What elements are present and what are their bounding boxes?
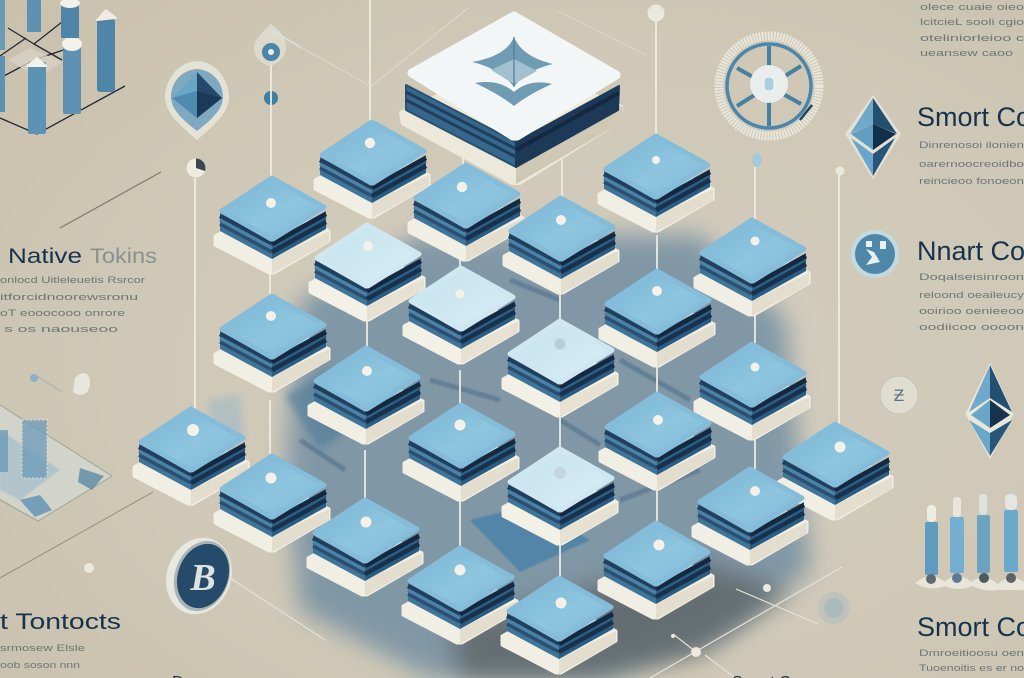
icon: pin marker [254, 24, 300, 66]
text block: upper right [920, 2, 1024, 59]
block [695, 344, 809, 440]
text block: native tokens: oT eooocooo onrore [0, 308, 125, 319]
text block: native tokens: itforcidnoorewsronu [0, 292, 138, 303]
heading: t Tontocts: t Tontocts [0, 609, 121, 634]
icon: isometric pillars [0, 0, 125, 134]
block [134, 409, 248, 505]
block [504, 198, 618, 294]
block [404, 405, 518, 501]
block [215, 178, 329, 274]
text block: right 3: Dmroeitioosu oen [919, 648, 1024, 659]
block [215, 296, 329, 392]
icon: half ball [186, 158, 206, 178]
icon: B coin [156, 528, 242, 624]
block [695, 220, 809, 316]
heading: Native Tokens: Tokins [90, 245, 157, 268]
text block: right 1: Dinrenosoi ilonien [919, 140, 1024, 151]
clipped bottom headings [172, 674, 817, 678]
block [502, 578, 616, 674]
text block: right 2: ooirioo oenieeoo [919, 306, 1024, 317]
icon: white ball [84, 563, 94, 573]
text block: right 2: oodiicoo oooon [919, 322, 1024, 333]
icon: isometric city sketch [0, 373, 112, 521]
text block: right 2: Doqalseisinroon [919, 272, 1024, 283]
text block: right 1: reincieoo fonoeon [919, 176, 1024, 187]
text block: right 3 [919, 648, 1024, 674]
text block: upper right: ueansew caoo [920, 48, 1013, 59]
icon: vials [915, 494, 1024, 590]
pin heads [187, 138, 846, 609]
vertical pin lines [195, 0, 839, 600]
text block: upper right: olece cuaie oieo [920, 2, 1024, 13]
text block: right 3: Tuoenoitis es er no [919, 663, 1024, 674]
light block [503, 449, 617, 545]
block [599, 136, 713, 232]
icon: B coin: B [189, 557, 216, 599]
light block [310, 225, 424, 321]
block [693, 469, 807, 565]
block [409, 165, 523, 261]
icon: round badge [851, 230, 899, 278]
icon: ethereum right upper [846, 96, 900, 178]
text block: lower left: srmosew Elsle [0, 643, 85, 654]
icon: ethereum right lower [966, 364, 1013, 458]
block [308, 500, 422, 596]
block [309, 348, 423, 444]
text block: right 2: reloond oeaileucy [919, 290, 1024, 301]
text block: native tokens: s os naouseoo [4, 324, 118, 335]
light block [404, 268, 518, 364]
text block: right 1 [919, 140, 1024, 187]
icon: small faded coin [818, 592, 850, 624]
heading: Native Tokens: Native [8, 245, 82, 268]
text block: lower left: oob soson nnn [0, 660, 80, 671]
heading: Native Tokens [8, 245, 157, 268]
reflective floor shadow [208, 235, 810, 678]
block [215, 456, 329, 552]
block [403, 548, 517, 644]
block [600, 271, 714, 367]
text block: right 2 [919, 272, 1024, 333]
icon: pale coin [880, 376, 918, 414]
block [599, 523, 713, 619]
block row 1 [315, 122, 429, 218]
light block [503, 321, 617, 417]
text block: upper right: oteliniorleioo c [920, 33, 1024, 44]
text block: right 1: oarernoocreoidbo [919, 159, 1024, 170]
text block: upper right: lcitcieL sooli cgio [920, 17, 1024, 28]
large top block [400, 16, 622, 184]
icon: ethereum badge [165, 61, 229, 140]
text block: native tokens: onlocd Uitleleuetis Rsrcor [0, 275, 145, 286]
heading: Nnart Co: Nnart Co [917, 236, 1024, 266]
icon: pale coin: Ƶ [894, 386, 904, 405]
text block: native tokens [0, 275, 145, 335]
icon: steering wheel [719, 36, 819, 136]
icon: connector dots [264, 4, 844, 657]
block [600, 394, 714, 490]
block [778, 424, 892, 520]
text block: lower left [0, 643, 85, 671]
